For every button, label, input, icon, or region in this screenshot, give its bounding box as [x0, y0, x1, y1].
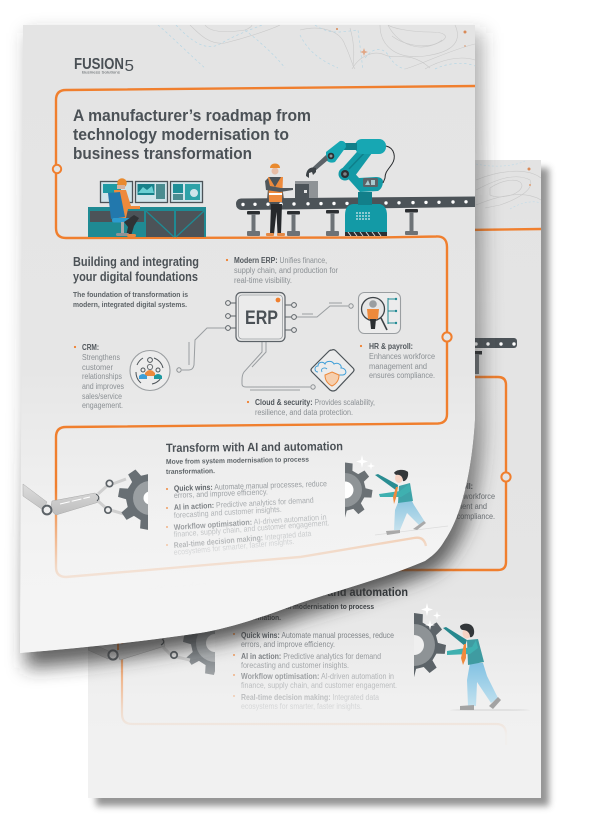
ERP chip	[236, 292, 285, 342]
faded next section heading: Create a competitive edge	[72, 580, 208, 605]
title	[73, 109, 310, 159]
back page conveyor	[475, 338, 517, 374]
AI bullet list: finance, supply chain, and customer engagement.	[173, 518, 330, 539]
Modern ERP text: real-time visibility.	[234, 276, 292, 285]
conveyor legs	[247, 209, 418, 236]
section heading: digital foundations: your digital foundations	[73, 270, 198, 284]
cloud and security text	[247, 398, 375, 417]
back HR text	[457, 483, 495, 520]
section heading: digital foundations: Building and integrating	[73, 255, 199, 269]
left gear	[113, 461, 187, 535]
back bullet list: errors, and improve efficiency.	[241, 640, 335, 649]
HR and payroll text: Enhances workforce	[369, 352, 435, 361]
Modern ERP text: supply chain, and production for	[234, 266, 338, 275]
lower page fade	[20, 470, 476, 660]
section heading: AI and automation: Transform with AI and automation	[166, 439, 343, 455]
back sparkles	[421, 603, 441, 630]
back HR text: management and	[429, 502, 487, 511]
title: technology modernisation to	[73, 125, 289, 144]
CRM text: customer	[82, 363, 113, 372]
CRM text: relationships	[82, 372, 122, 381]
icon: HR magnifier	[358, 292, 400, 334]
CRM text: CRM:	[82, 343, 99, 352]
back intro	[252, 604, 374, 620]
AI bullet list: forecasting and customer insights.	[174, 505, 282, 520]
desk	[88, 207, 206, 237]
foundations intro: The foundation of transformation is	[73, 292, 188, 299]
back heading: Transform with AI and automation	[233, 585, 408, 599]
illustration: factory worker	[265, 164, 293, 236]
back right gear	[414, 613, 446, 677]
back page contour pattern	[476, 161, 541, 209]
sparkles	[356, 455, 375, 470]
illustration: conveyor belt	[236, 196, 475, 236]
CRM text: and improves	[82, 382, 124, 391]
back bullet list: forecasting and customer insights.	[241, 661, 349, 670]
right gear	[314, 459, 376, 521]
contour map pattern	[190, 25, 475, 69]
back page orange line	[475, 228, 541, 232]
title: business transformation	[73, 144, 252, 163]
AI bullet list: errors, and improve efficiency.	[174, 487, 268, 500]
back bullet list: Real-time decision making: Integrated data	[241, 693, 379, 702]
icon: CRM circle	[130, 350, 170, 390]
header node	[53, 165, 61, 173]
back person pushing gear	[443, 624, 530, 711]
Modern ERP text	[226, 256, 338, 285]
logo: Fusion5 Business Solutions: 5	[124, 58, 134, 75]
cloud and security text: resilience, and data protection.	[255, 408, 353, 417]
section heading: digital foundations	[73, 255, 199, 284]
back left orange connector	[120, 643, 506, 732]
front page shadow	[26, 33, 484, 668]
logo: Fusion5 Business Solutions: FUSION	[74, 56, 124, 73]
back bullet list: AI in action: Predictive analytics for demand	[241, 652, 381, 661]
back bullet list: finance, supply chain, and customer engagement.	[241, 681, 397, 690]
back robot arm	[88, 636, 190, 660]
back HR text: HR & payroll:	[429, 482, 473, 491]
illustration: control room desk and operator	[88, 178, 206, 237]
illustration: robot arm	[306, 139, 394, 236]
AI bullet list: AI in action: Predictive analytics for demand	[174, 496, 314, 512]
title: A manufacturer’s roadmap from	[73, 106, 311, 125]
orange roadmap path: header, foundations and AI panels	[56, 86, 475, 577]
foundations intro	[73, 292, 188, 309]
HR and payroll text: HR & payroll:	[369, 342, 413, 351]
logo: Fusion5 Business Solutions: Business Solutions	[82, 70, 120, 74]
back bullet list: Workflow optimisation: AI-driven automation in	[241, 672, 394, 681]
back intro: transformation.	[233, 613, 281, 622]
CRM text: engagement.	[82, 401, 123, 410]
Modern ERP text: Modern ERP: Unifies finance,	[234, 256, 327, 265]
foundations node	[442, 332, 452, 342]
icon: cloud and shield	[311, 350, 354, 391]
foundations intro: modern, integrated digital systems.	[73, 302, 187, 309]
cloud and security text: Cloud & security: Provides scalability,	[255, 398, 375, 407]
CRM text	[74, 343, 124, 410]
AI bullet list	[166, 479, 330, 557]
ERP chip: ERP	[245, 308, 278, 329]
back page	[88, 160, 541, 798]
HR and payroll text: management and	[369, 362, 427, 371]
back page shadow	[96, 168, 549, 806]
HR and payroll text: ensures compliance.	[369, 371, 435, 380]
back HR text: Enhances workforce	[429, 492, 495, 501]
AI bullet list: Real-time decision making: Integrated data	[173, 529, 312, 550]
AI bullet list: Quick wins: Automate manual processes, reduce	[174, 479, 327, 493]
CRM text: Strengthens	[82, 353, 120, 362]
AI bullet list: Workflow optimisation: AI-driven automation in	[174, 513, 327, 532]
AI bullet list: ecosystems for smarter, faster insights.	[173, 537, 295, 557]
front page	[20, 25, 476, 660]
back bullet list: Quick wins: Automate manual processes, reduce	[241, 631, 394, 640]
AI intro: Move from system modernisation to process	[166, 457, 309, 466]
HR and payroll text	[360, 342, 435, 380]
AI intro	[166, 457, 309, 476]
AI intro: transformation.	[166, 468, 215, 476]
back HR text: ensures compliance.	[429, 512, 495, 521]
circuit connectors	[182, 303, 348, 390]
illustration: crate on conveyor	[295, 181, 318, 198]
back intro: Move from system modernisation to process	[233, 602, 374, 611]
person pushing gear	[375, 470, 448, 535]
operator	[108, 178, 140, 237]
back bullet list	[233, 631, 397, 711]
back page panel outline	[398, 376, 508, 572]
robot arm reaching for gear	[23, 479, 126, 515]
CRM text: sales/service	[82, 392, 122, 401]
monitors	[100, 182, 202, 202]
back node	[501, 472, 511, 482]
back left gear	[183, 630, 215, 675]
ERP chip pins	[177, 301, 353, 389]
back bullet list: ecosystems for smarter, faster insights.	[241, 702, 362, 711]
